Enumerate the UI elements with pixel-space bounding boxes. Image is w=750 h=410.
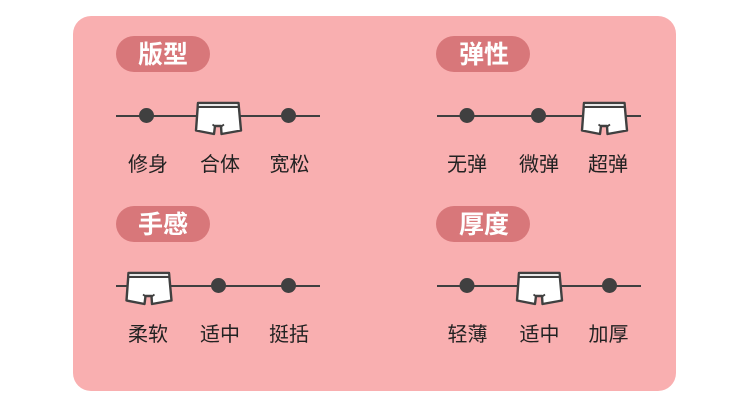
marker dot: loose xyxy=(281,108,296,123)
heading pill: thickness xyxy=(436,206,530,242)
option labels: hand feel: 柔软 xyxy=(128,323,168,346)
option labels: fit: 合体 xyxy=(200,153,240,176)
marker dot: thin xyxy=(460,278,474,293)
icon: underwear selected medium xyxy=(517,273,562,304)
option labels: elasticity: 无弹 xyxy=(447,153,487,176)
option labels: thickness xyxy=(448,323,628,346)
option labels: fit xyxy=(128,153,310,176)
option labels: fit: 宽松 xyxy=(270,153,310,176)
option labels: hand feel: 适中 xyxy=(200,323,240,346)
marker dot: crisp xyxy=(281,278,296,293)
heading pill: hand feel: 手感 xyxy=(138,210,188,239)
scale line: thickness xyxy=(437,285,641,287)
option labels: thickness: 加厚 xyxy=(588,323,628,346)
scale line: hand feel xyxy=(116,285,320,287)
option labels: elasticity: 超弹 xyxy=(588,153,628,176)
heading pill: elasticity: 弹性 xyxy=(459,41,509,69)
scale line: fit xyxy=(116,115,320,117)
option labels: elasticity xyxy=(447,153,628,176)
marker dot: thick xyxy=(602,278,617,293)
icon: underwear selected soft xyxy=(126,273,172,304)
marker dot: slight xyxy=(531,108,546,123)
marker dot: slim xyxy=(139,108,154,123)
section: elasticity xyxy=(436,36,641,176)
option labels: hand feel xyxy=(128,323,309,346)
icon: underwear selected super stretch xyxy=(582,103,627,134)
heading pill: thickness: 厚度 xyxy=(459,211,509,239)
option labels: thickness: 适中 xyxy=(520,323,560,346)
marker dot: medium xyxy=(211,278,226,293)
background panel xyxy=(73,16,676,391)
section: thickness xyxy=(436,206,641,346)
section: fit xyxy=(116,36,320,176)
heading pill: fit: 版型 xyxy=(138,41,188,69)
icon: underwear selected regular xyxy=(196,103,241,134)
section: hand feel xyxy=(116,206,320,346)
marker dot: none xyxy=(460,108,474,123)
option labels: thickness: 轻薄 xyxy=(448,323,488,346)
option labels: elasticity: 微弹 xyxy=(519,153,559,176)
heading pill: elasticity xyxy=(436,36,530,72)
option labels: fit: 修身 xyxy=(128,153,168,176)
heading pill: hand feel xyxy=(116,206,210,242)
heading pill: fit xyxy=(116,36,210,72)
scale line: elasticity xyxy=(437,115,641,117)
option labels: hand feel: 挺括 xyxy=(269,323,309,346)
